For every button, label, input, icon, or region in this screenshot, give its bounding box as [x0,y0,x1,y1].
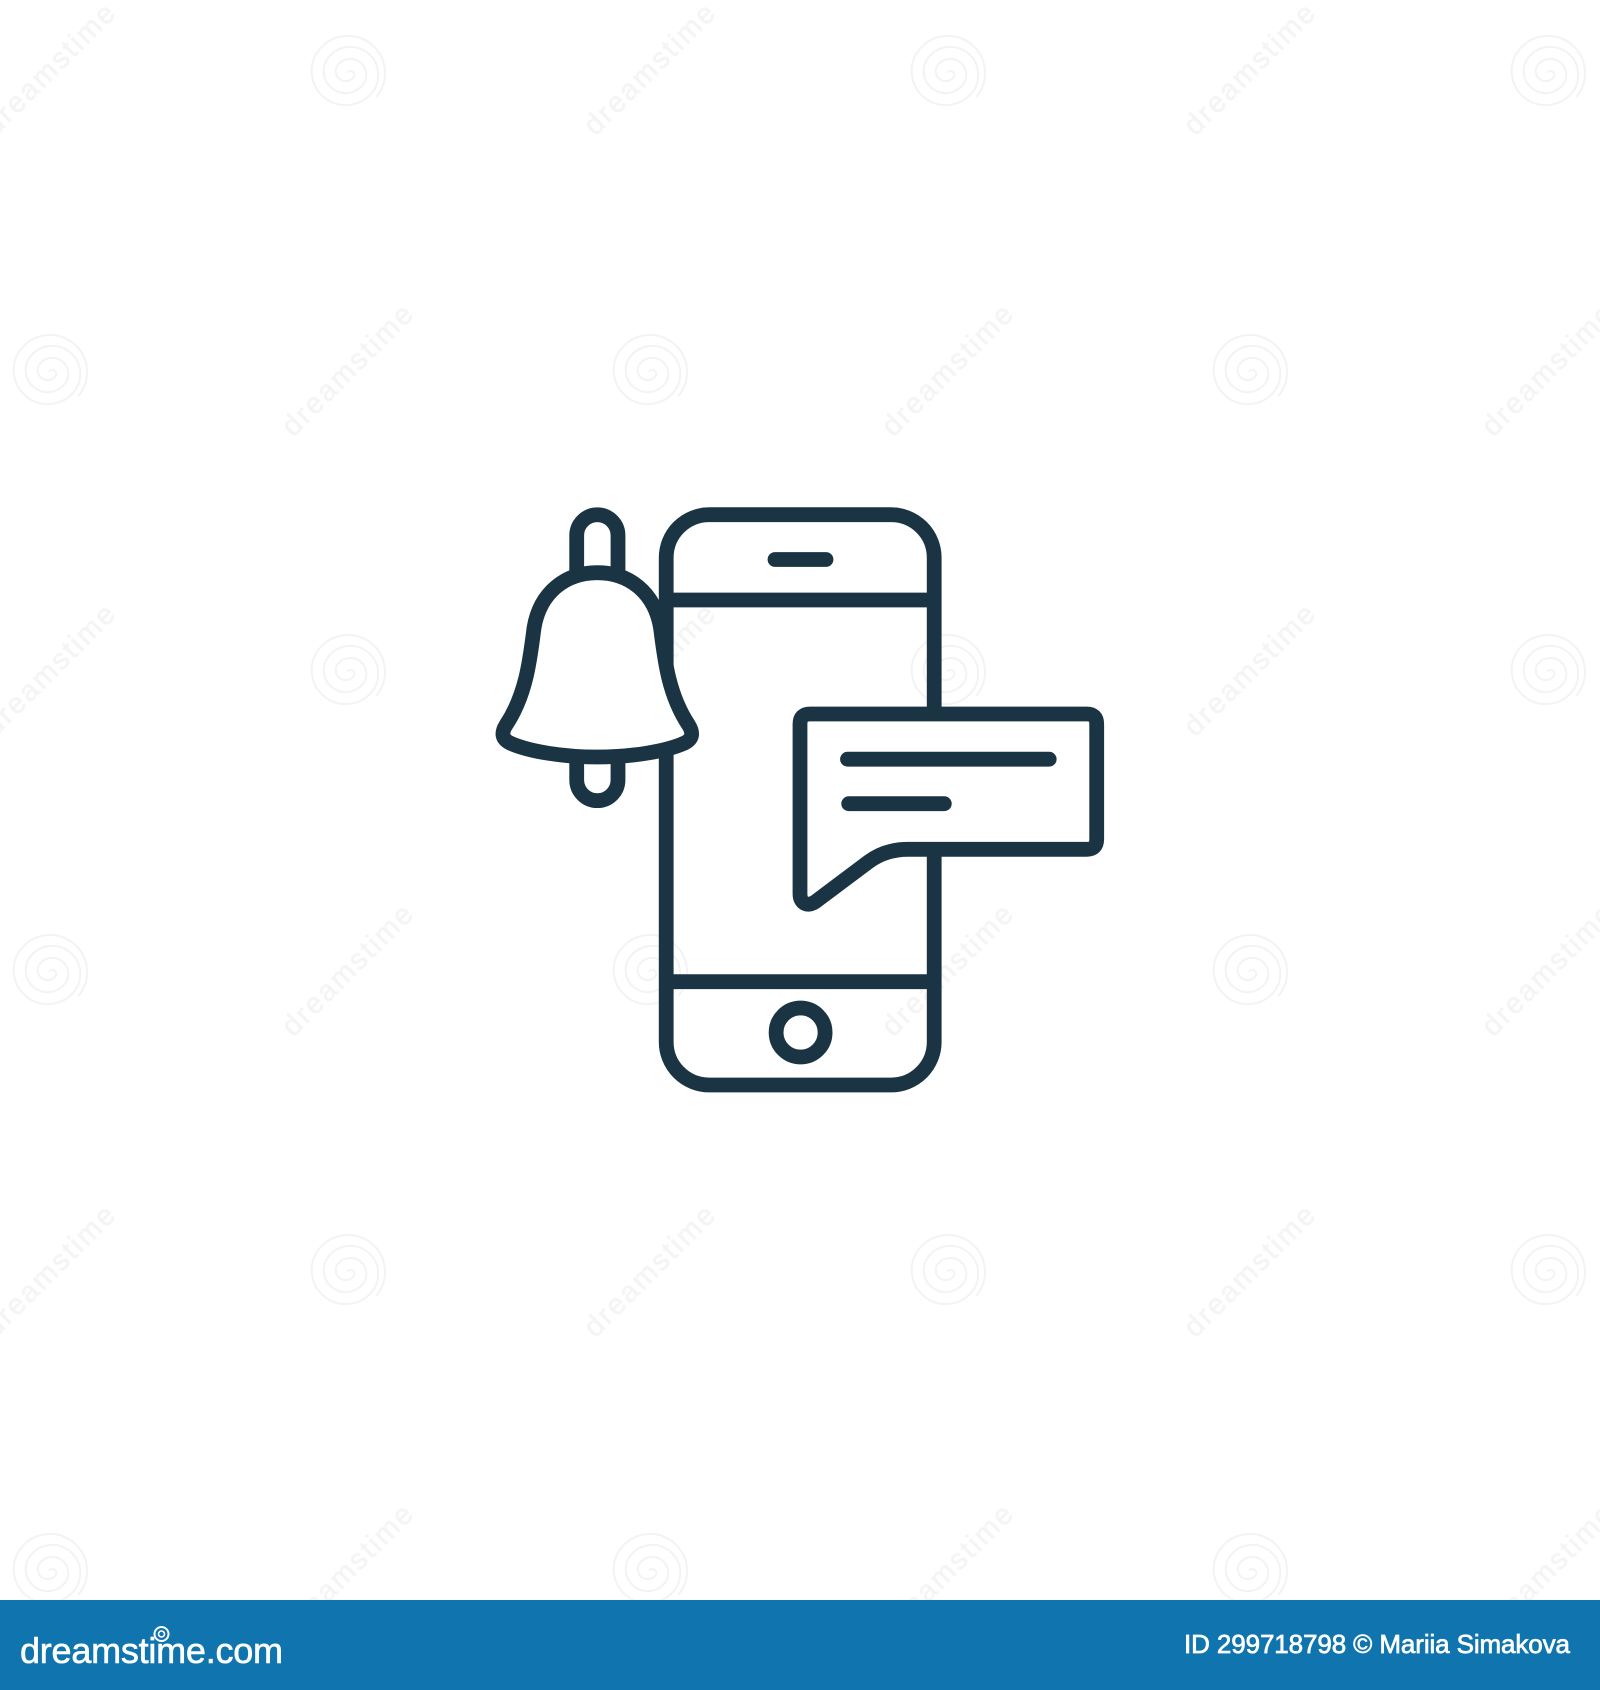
watermark: dreamstime text: dreamstime [578,599,722,743]
icon: speech bubble [800,714,1097,904]
watermark: dreamstime text: dreamstime [876,299,1020,443]
logo: dreamstime.com: dreamstime.com [20,1630,283,1671]
watermark: dreamstime text: dreamstime [578,1200,722,1344]
watermark: dreamstime text: dreamstime [876,899,1020,1043]
icon: phone with bell and speech bubble [503,515,1097,1085]
watermark: dreamstime text: dreamstime [276,299,420,443]
watermark: dreamstime text: dreamstime [1178,1200,1322,1344]
watermark: dreamstime text: dreamstime [276,899,420,1043]
watermark: dreamstime text: dreamstime [1178,599,1322,743]
image id and credit: ID 299718798 © Mariia Simakova [1184,1629,1571,1659]
icon: smartphone [666,515,934,1085]
icon: bell [503,515,692,801]
watermark: dreamstime text: dreamstime [876,1499,1020,1643]
watermark: dreamstime text: dreamstime [276,1499,420,1643]
watermark: dreamstime text: dreamstime [1178,0,1322,142]
watermark: dreamstime text: dreamstime [578,0,722,142]
footer bar [0,1600,1600,1690]
